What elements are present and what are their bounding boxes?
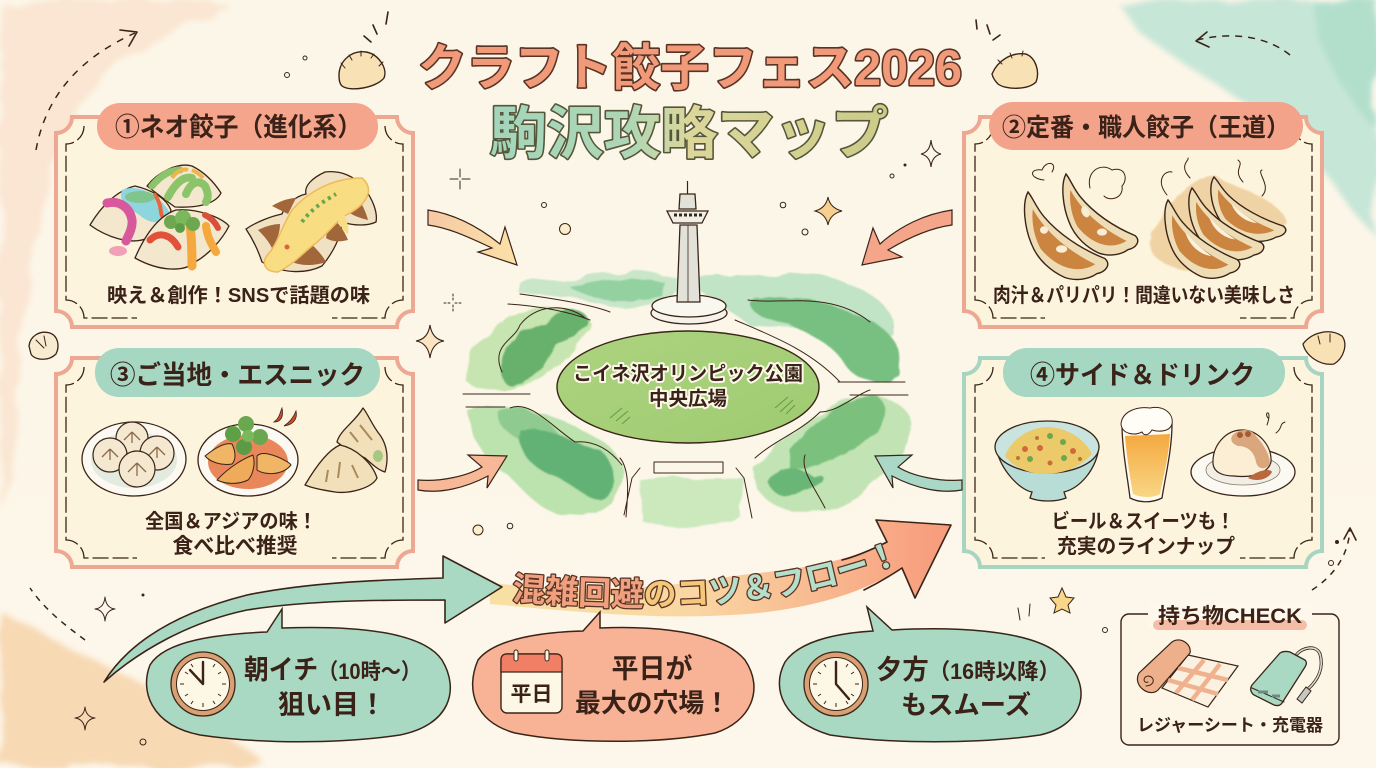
title line 1: クラフト餃子フェス2026: [418, 40, 962, 96]
panel 2: classic gyoza: [964, 102, 1322, 327]
pair of large dumplings: [305, 408, 387, 492]
callout text: [575, 653, 730, 718]
flow arrow: teal: [104, 556, 502, 682]
callout: evening: [779, 607, 1081, 742]
panel 1 header: ①ネオ餃子（進化系）: [115, 112, 362, 142]
plate of steamed buns: [82, 422, 186, 496]
bowl of fried rice: [995, 421, 1099, 501]
arrow: panel 1 to map: [428, 210, 517, 265]
checklist heading: 持ち物CHECK: [1158, 605, 1302, 628]
tree masses: [463, 270, 912, 528]
icon: calendar: [501, 650, 562, 713]
checklist box: [1121, 602, 1339, 745]
icon: leisure sheet: [1137, 640, 1238, 707]
callout text: [244, 655, 421, 720]
icon: dumpling left edge: [29, 332, 58, 359]
callout text: 狙い目！: [278, 690, 386, 720]
title line 2: 駒沢攻略マップ: [490, 102, 888, 166]
map label: こイネ沢オリンピック公園: [573, 363, 803, 385]
lawn: [557, 331, 819, 443]
cheese sauced dumplings: [246, 172, 376, 272]
panel 2 header: [989, 102, 1303, 150]
panel 2 caption: 肉汁＆パリパリ！間違いない美味しさ: [993, 284, 1295, 307]
icon: power bank: [1251, 648, 1321, 706]
arrow: panel 4 to map: [875, 455, 962, 491]
panel 3: regional and ethnic: 食べ比べ推奨: [172, 535, 298, 558]
rainbow sauced dumplings: [90, 165, 229, 269]
flow heading: 混雑回避のコツ＆フロー！: [512, 542, 890, 610]
icon: clock 4:00: [804, 652, 868, 716]
icon: dumpling right edge: [1303, 332, 1345, 364]
callout text: 朝イチ（10時〜）: [244, 655, 421, 685]
panel 1: neo gyoza: [56, 103, 413, 327]
checklist heading: [1148, 602, 1312, 630]
glass of beer: [1121, 407, 1172, 502]
central map: Komazawa Olympic Park: [463, 181, 912, 528]
callout text: [876, 655, 1060, 720]
panel 4 header: [1003, 348, 1285, 397]
panel 4: sides and drinks: 充実のラインナップ: [1057, 535, 1235, 558]
panel 4 header: ④サイド＆ドリンク: [1030, 360, 1255, 390]
panel 3 header: [95, 348, 380, 397]
icon: dumpling top right: [992, 51, 1038, 88]
plate of spicy gyoza with cilantro: [198, 408, 298, 496]
callout: weekdays: [473, 612, 754, 741]
steam and gyoza with lacy crust: [1147, 158, 1287, 278]
callout text: 夕方（16時以降）: [876, 655, 1060, 685]
panel 3 header: ③ご当地・エスニック: [110, 360, 365, 390]
flow arrow: yellow to salmon: [490, 520, 951, 616]
panel 4 caption: ビール＆スイーツも！: [1052, 510, 1234, 533]
panel 1 header: [97, 103, 378, 150]
map label: [573, 363, 803, 410]
callout text: 最大の穴場！: [575, 688, 730, 718]
paths and tree outlines: [463, 294, 908, 518]
panel 3 caption: 全国＆アジアの味！: [145, 510, 317, 533]
callout text: もスムーズ: [901, 690, 1031, 720]
arrow: panel 2 to map: [862, 210, 952, 265]
steam and grilled gyoza pair: [1025, 163, 1138, 279]
panel 1 caption: 映え＆創作！SNSで話題の味: [107, 284, 370, 307]
arrow: panel 3 to map: [418, 455, 507, 491]
title: [418, 40, 962, 166]
panel 4: sides and drinks: [964, 348, 1322, 567]
checklist caption: レジャーシート・充電器: [1137, 716, 1323, 735]
icon: calendar: 平日: [510, 683, 552, 706]
callout text: 平日が: [612, 653, 692, 684]
icon: dumpling top left: [339, 51, 385, 89]
callout: morning: [147, 609, 450, 742]
map label: 中央広場: [649, 388, 727, 410]
panel 2 header: ②定番・職人餃子（王道）: [1002, 114, 1290, 142]
dessert bun on plate: [1191, 413, 1295, 496]
Komazawa Olympic tower: [651, 181, 727, 324]
panel 3: regional and ethnic: [56, 348, 413, 567]
icon: clock 10:00: [171, 652, 235, 716]
